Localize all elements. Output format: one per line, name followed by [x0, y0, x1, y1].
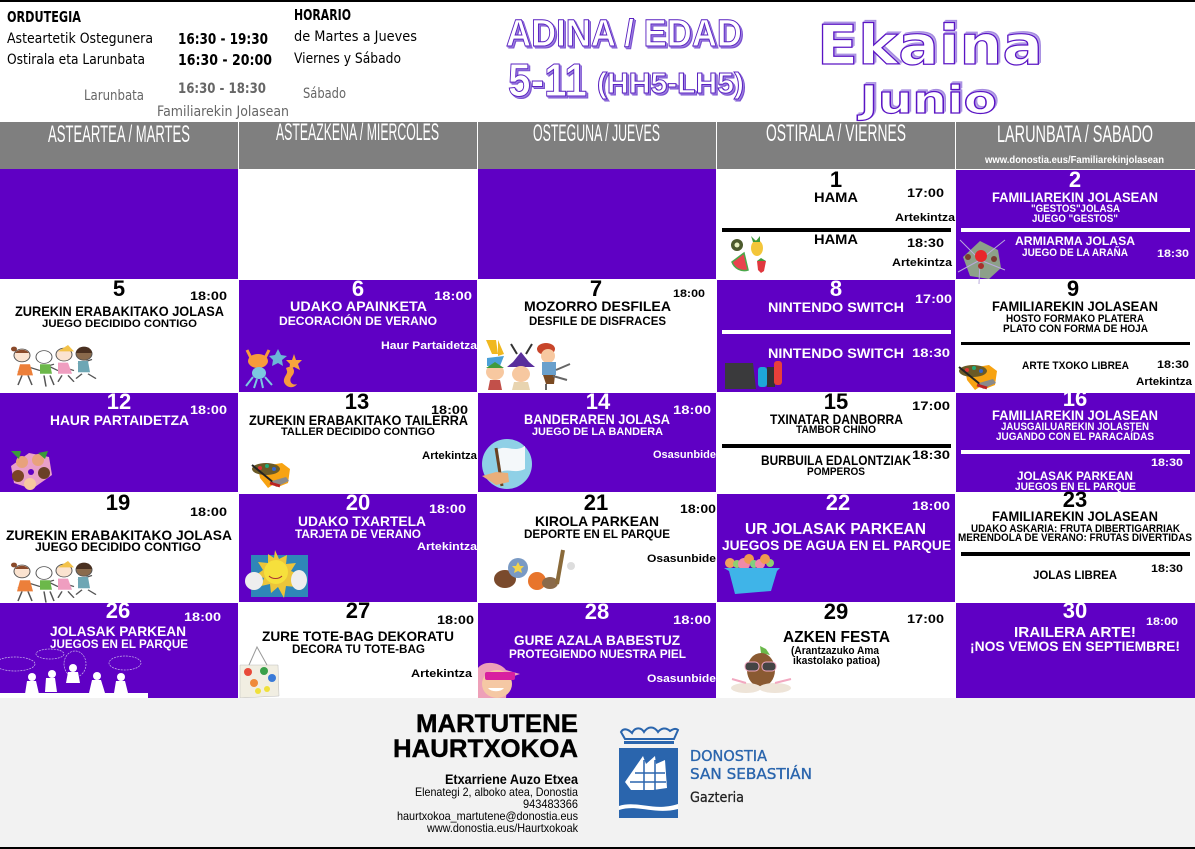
activity — [509, 632, 716, 685]
weekday header row: ASTEARTEA / MARTES — [48, 121, 190, 148]
time: 18:00 — [190, 289, 227, 303]
panel: day 23 — [958, 487, 1192, 582]
icon: fruits — [731, 236, 766, 273]
panel: day 8 — [717, 276, 955, 392]
activity: DEPORTE EN EL PARQUE — [524, 527, 670, 541]
panel: day 14 — [478, 389, 716, 492]
activity spider game — [1015, 234, 1189, 260]
schedule block in Basque: ORDUTEGIA — [7, 8, 81, 26]
day number 26: 26 — [106, 598, 130, 623]
activity — [6, 527, 232, 554]
panel: day 12 — [0, 389, 238, 492]
panel: day 26 — [0, 598, 238, 698]
activity 18:30 — [814, 231, 953, 269]
day number 2: 2 — [1069, 167, 1081, 192]
activity free art corner: ARTE TXOKO LIBREA — [1022, 360, 1129, 372]
activity parachute: JUGANDO CON EL PARACAÍDAS — [996, 430, 1154, 443]
activity: JUEGOS EN EL PARQUE — [50, 637, 188, 651]
time: 17:00 — [907, 612, 944, 626]
activity: Artekintza — [417, 541, 478, 553]
activity family game: "GESTOS"JOLASA — [1031, 203, 1120, 215]
centre name and contact — [393, 710, 579, 835]
age heading — [506, 13, 744, 106]
activity 18:30: Artekintza — [892, 257, 953, 269]
activity family leaf plate: PLATO CON FORMA DE HOJA — [1003, 323, 1148, 335]
day number 14: 14 — [586, 389, 611, 414]
schedule block in Basque: Asteartetik Ostegunera — [7, 31, 153, 47]
activity free art corner: 18:30 — [1157, 359, 1189, 371]
activity: Osasunbide — [647, 553, 716, 565]
activity — [15, 303, 224, 330]
day number 9: 9 — [1067, 276, 1079, 301]
activity 17:00: 17:00 — [907, 186, 944, 200]
activity 18:30 — [761, 448, 950, 478]
icon: children circle — [11, 451, 52, 490]
activity — [524, 411, 716, 461]
city name: SAN SEBASTIÁN — [690, 764, 812, 783]
panel: day 16 — [956, 386, 1195, 493]
activity — [524, 513, 716, 565]
activity: Artekintza — [422, 450, 478, 462]
icon: water balloon bucket — [724, 554, 780, 594]
time: 18:00 — [680, 502, 716, 516]
activity spider game: JUEGO DE LA ARAÑA — [1022, 246, 1128, 259]
day number 20: 20 — [346, 490, 370, 515]
activity family leaf plate: FAMILIAREKIN JOLASEAN — [992, 298, 1158, 314]
month title: Ekaina — [817, 14, 1043, 77]
icon: sea animals — [246, 349, 302, 388]
icon: children silhouettes — [0, 649, 148, 698]
activity: IRAILERA ARTE! — [1014, 624, 1136, 641]
activity: AZKEN FESTA — [783, 629, 890, 646]
day number 5: 5 — [113, 276, 125, 301]
centre name and contact: Etxarriene Auzo Etxea — [445, 771, 578, 787]
activity — [279, 298, 478, 352]
centre name and contact: haurtxokoa_martutene@donostia.eus — [397, 809, 578, 823]
activity — [295, 513, 478, 553]
weekday header row: OSTEGUNA / JUEVES — [533, 120, 660, 147]
day number 29: 29 — [824, 599, 848, 624]
activity 18:30: NINTENDO SWITCH — [768, 345, 904, 361]
activity: ZUREKIN ERABAKITAKO JOLASA — [15, 303, 224, 319]
icon: spider web — [958, 240, 1005, 284]
activity 18:30: HAMA — [814, 231, 858, 247]
activity 18:30: 18:30 — [912, 448, 950, 462]
schedule block in Spanish: Viernes y Sábado — [294, 51, 401, 67]
activity 17:00: Artekintza — [895, 212, 956, 224]
age heading: (HH5-LH5) — [597, 68, 744, 100]
family play Saturday schedule — [84, 81, 346, 120]
activity 17:00 — [770, 399, 950, 436]
activity — [783, 629, 890, 667]
panel: day 9 — [959, 276, 1193, 390]
icon: game console — [725, 361, 782, 389]
icon: palette — [252, 463, 290, 488]
panel: day 20 — [239, 490, 478, 602]
activity parachute: JAUSGAILUAREKIN JOLASTEN — [1001, 421, 1149, 433]
icon: flag — [482, 439, 532, 489]
activity: JUEGO DECIDIDO CONTIGO — [42, 318, 197, 330]
activity free play: JOLAS LIBREA — [1033, 568, 1117, 582]
activity family game — [992, 189, 1158, 225]
family play Saturday schedule: 16:30 - 18:30 — [178, 81, 266, 97]
activity — [249, 412, 478, 462]
activity: ZURE TOTE-BAG DEKORATU — [262, 628, 454, 644]
activity: JUEGO DE LA BANDERA — [532, 426, 663, 438]
top border — [0, 0, 1195, 2]
icon: coconut with sunglasses — [731, 646, 791, 693]
day number 27: 27 — [346, 598, 370, 623]
empty cell thursday — [478, 169, 716, 279]
activity 18:30: 18:30 — [907, 236, 944, 250]
bottom border — [0, 847, 1195, 849]
time: 18:00 — [437, 613, 474, 627]
time: 18:00 — [184, 610, 221, 624]
icon: sports gear — [494, 550, 575, 590]
schedule block in Basque: 16:30 - 19:30 — [178, 30, 268, 48]
activity 18:30: POMPEROS — [807, 466, 865, 478]
activity 17:00: NINTENDO SWITCH — [768, 299, 904, 315]
activity: JOLASAK PARKEAN — [50, 623, 186, 639]
activity 17:00: TXINATAR DANBORRA — [770, 411, 903, 427]
centre name and contact: 943483366 — [523, 797, 578, 811]
panel: day 6 — [239, 276, 478, 392]
weekday header row: OSTIRALA / VIERNES — [766, 120, 906, 147]
activity free art corner — [1022, 359, 1193, 388]
icon: sun card — [245, 550, 308, 598]
activity: ¡NOS VEMOS EN SEPTIEMBRE! — [970, 638, 1180, 654]
day number 8: 8 — [830, 276, 842, 301]
activity: ZUREKIN ERABAKITAKO JOLASA — [6, 527, 232, 543]
panel: day 15 — [722, 389, 951, 478]
centre name and contact: MARTUTENE — [416, 710, 578, 738]
activity: Artekintza — [411, 668, 473, 680]
day number 21: 21 — [584, 490, 608, 515]
panel: day 7 — [486, 276, 705, 390]
activity family leaf plate — [992, 298, 1158, 335]
day number 23: 23 — [1063, 487, 1087, 512]
weekday header row — [0, 119, 1195, 169]
activity free play — [1033, 563, 1183, 582]
age heading: 5-11 — [508, 54, 587, 106]
activity — [262, 628, 473, 680]
activity 18:30: 18:30 — [912, 346, 950, 360]
city name: Gazteria — [690, 790, 744, 806]
activity: (Arantzazuko Ama — [791, 645, 880, 657]
day number 30: 30 — [1063, 598, 1087, 623]
activity: MOZORRO DESFILEA — [524, 298, 671, 314]
activity: BANDERAREN JOLASA — [524, 411, 670, 427]
age heading: ADINA / EDAD — [506, 13, 742, 55]
activity: Haur Partaidetza — [381, 340, 478, 352]
activity free art corner: Artekintza — [1136, 376, 1193, 388]
day number 1: 1 — [830, 167, 842, 192]
panel: day 21 — [494, 490, 716, 590]
panel: day 28 — [478, 599, 716, 698]
centre name and contact: Elenategi 2, alboko atea, Donostia — [415, 785, 578, 799]
activity — [722, 521, 951, 553]
time: 18:00 — [434, 289, 472, 303]
centre name and contact: HAURTXOKOA — [393, 735, 578, 763]
activity: DECORA TU TOTE-BAG — [292, 642, 425, 656]
day number 12: 12 — [107, 389, 131, 414]
activity spider game: ARMIARMA JOLASA — [1015, 234, 1135, 248]
time: 18:00 — [1146, 616, 1178, 628]
activity — [524, 298, 671, 328]
panel: day 27 — [240, 598, 474, 698]
panel: day 13 — [249, 389, 478, 488]
activity: JUEGO DECIDIDO CONTIGO — [35, 540, 201, 554]
activity: UDAKO TXARTELA — [298, 513, 426, 529]
activity family game: JUEGO "GESTOS" — [1032, 213, 1118, 225]
day number 28: 28 — [585, 599, 609, 624]
activity: TARJETA DE VERANO — [295, 527, 421, 541]
activity park games — [1015, 457, 1183, 493]
time: 18:00 — [190, 505, 227, 519]
icon: children — [11, 561, 96, 603]
footer panel — [0, 698, 1195, 847]
activity: ZUREKIN ERABAKITAKO TAILERRA — [249, 412, 468, 428]
activity: ikastolako patioa) — [793, 655, 880, 667]
schedule block in Basque: Ostirala eta Larunbata — [7, 52, 145, 68]
panel: day 1 — [722, 167, 956, 273]
centre name and contact: www.donostia.eus/Haurtxokoak — [426, 821, 579, 835]
weekday header row: ASTEAZKENA / MIERCOLES — [276, 119, 439, 146]
month title — [817, 14, 1043, 122]
activity spider game: 18:30 — [1157, 248, 1189, 260]
schedule block in Basque: 16:30 - 20:00 — [178, 51, 272, 69]
activity: JUEGOS DE AGUA EN EL PARQUE — [722, 537, 951, 553]
time: 18:00 — [431, 403, 468, 417]
activity 17:00: TAMBOR CHINO — [796, 424, 876, 436]
icon: Donostia coat of arms — [619, 728, 678, 818]
activity summer snack — [958, 508, 1192, 544]
activity 17:00: HAMA — [814, 189, 858, 205]
activity parachute: FAMILIAREKIN JOLASEAN — [992, 407, 1158, 423]
activity: Osasunbide — [653, 449, 716, 461]
schedule block in Basque — [7, 8, 272, 69]
day number 22: 22 — [826, 490, 850, 515]
activity — [970, 624, 1180, 654]
city name — [690, 747, 812, 806]
family play Saturday schedule: Sábado — [303, 86, 346, 102]
time: 18:00 — [429, 502, 466, 516]
day number 16: 16 — [1063, 386, 1087, 411]
empty cell tuesday — [0, 169, 238, 279]
activity summer snack: FAMILIAREKIN JOLASEAN — [992, 508, 1158, 524]
month title: Junio — [856, 78, 997, 122]
day number 13: 13 — [345, 389, 369, 414]
activity: UDAKO APAINKETA — [290, 298, 427, 314]
activity: DESFILE DE DISFRACES — [529, 314, 666, 328]
panel: day 2 — [956, 167, 1195, 284]
icon: costumed children — [486, 340, 570, 390]
panel: day 22 — [717, 490, 955, 602]
schedule block in Spanish: HORARIO — [294, 6, 351, 24]
time: 18:00 — [673, 403, 711, 417]
activity 18:30: BURBUILA EDALONTZIAK — [761, 452, 911, 468]
icon: tote bag — [240, 647, 279, 698]
activity: PROTEGIENDO NUESTRA PIEL — [509, 647, 686, 661]
panel: day 5 — [11, 276, 227, 387]
activity family game: FAMILIAREKIN JOLASEAN — [992, 189, 1158, 205]
activity: UR JOLASAK PARKEAN — [745, 521, 926, 538]
icon: palette — [959, 365, 997, 390]
city name: DONOSTIA — [690, 747, 768, 765]
time: 18:00 — [673, 613, 711, 627]
icon: children — [11, 345, 96, 387]
activity 17:00 — [768, 292, 952, 315]
activity park games: 18:30 — [1151, 457, 1183, 469]
activity 17:00: 17:00 — [912, 399, 950, 413]
activity 17:00: 17:00 — [915, 292, 952, 306]
weekday header row: www.donostia.eus/Familiarekinjolasean — [984, 155, 1164, 166]
family play Saturday schedule: Familiarekin Jolasean — [157, 104, 289, 120]
schedule block in Spanish — [294, 6, 417, 67]
icon: girl with sunglasses — [478, 663, 520, 698]
day number 19: 19 — [106, 490, 130, 515]
activity park games: JOLASAK PARKEAN — [1017, 469, 1133, 483]
day number 15: 15 — [824, 389, 848, 414]
activity: Osasunbide — [647, 673, 716, 685]
activity free play: 18:30 — [1151, 563, 1183, 575]
day number 7: 7 — [590, 276, 602, 301]
activity: TALLER DECIDIDO CONTIGO — [281, 426, 435, 438]
activity: HAUR PARTAIDETZA — [50, 412, 189, 428]
activity park games: JUEGOS EN EL PARQUE — [1015, 481, 1136, 493]
activity: DECORACIÓN DE VERANO — [279, 313, 437, 328]
activity parachute — [992, 407, 1158, 443]
activity: KIROLA PARKEAN — [535, 513, 659, 529]
panel: day 19 — [6, 490, 232, 603]
time: 18:00 — [190, 403, 227, 417]
time: 18:00 — [673, 288, 705, 300]
activity family leaf plate: HOSTO FORMAKO PLATERA — [1006, 313, 1144, 325]
schedule block in Spanish: de Martes a Jueves — [294, 29, 417, 45]
time: 18:00 — [912, 499, 950, 513]
panel: day 30 — [956, 598, 1195, 698]
panel: day 29 — [731, 599, 944, 693]
activity: GURE AZALA BABESTUZ — [514, 632, 680, 648]
activity — [50, 623, 188, 651]
activity 17:00 — [814, 186, 956, 224]
family play Saturday schedule: Larunbata — [84, 88, 144, 104]
day number 6: 6 — [352, 276, 364, 301]
